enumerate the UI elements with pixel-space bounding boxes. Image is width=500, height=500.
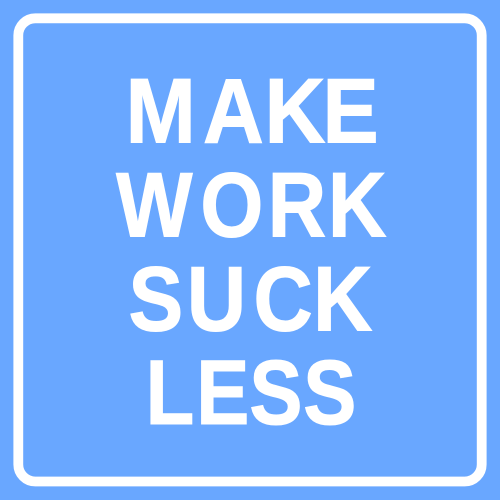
title: Make Work Suck Less bbox=[116, 59, 386, 444]
title: Make Work Suck Less: LESS bbox=[146, 342, 356, 444]
title: Make Work Suck Less: WORK bbox=[116, 155, 386, 256]
title: Make Work Suck Less: SUCK bbox=[128, 248, 372, 351]
title: Make Work Suck Less: MAKE bbox=[126, 59, 379, 162]
